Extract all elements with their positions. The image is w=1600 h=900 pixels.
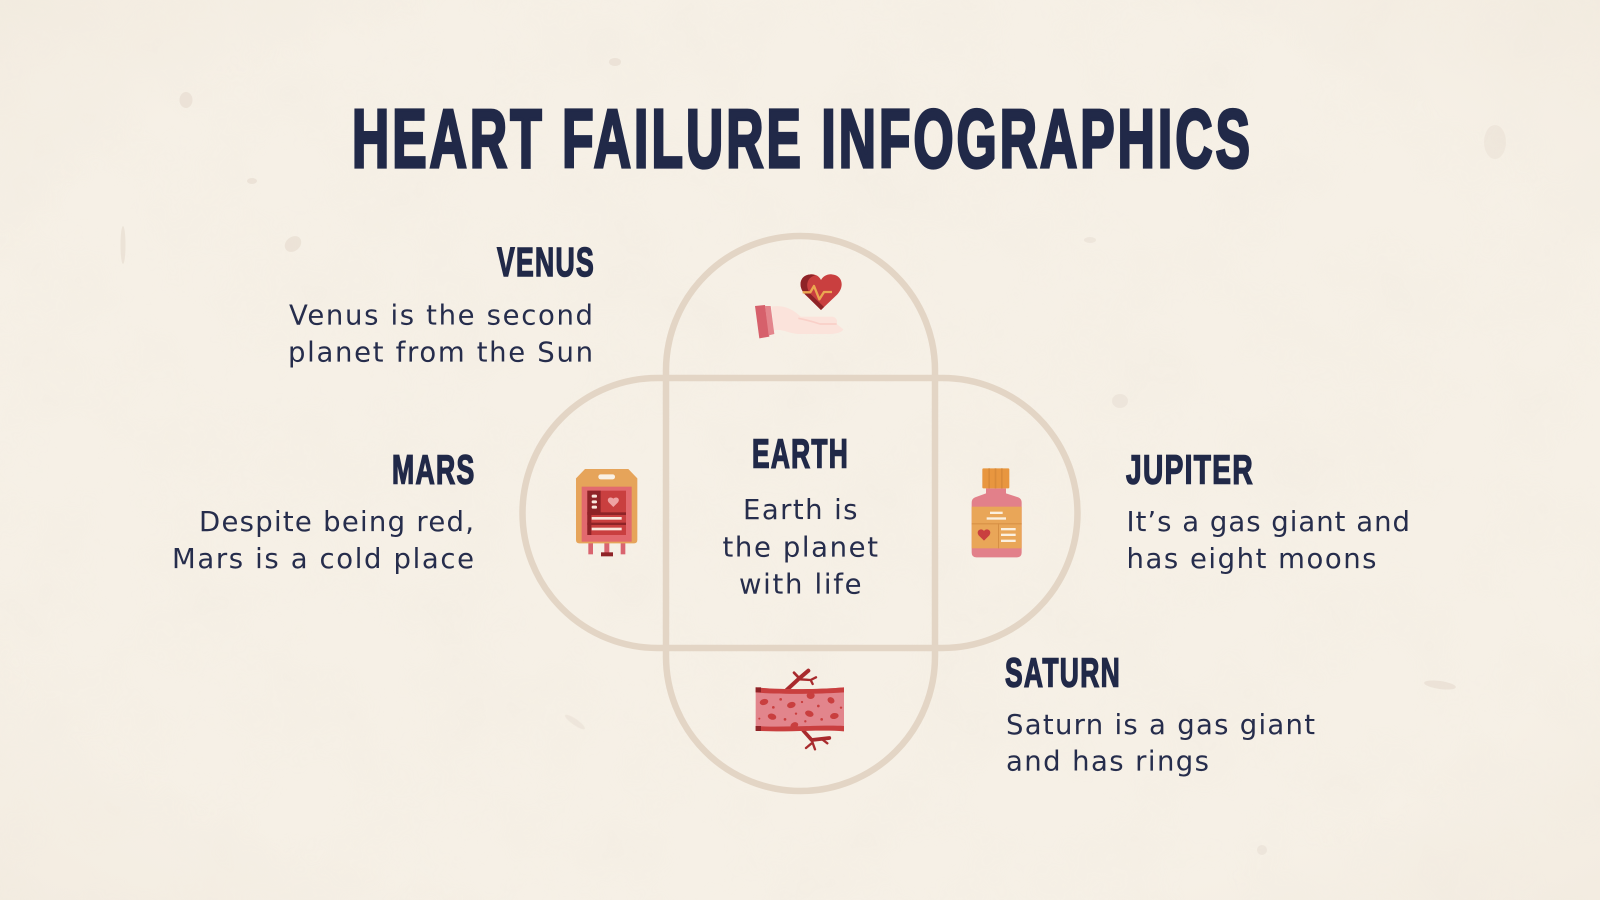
jupiter description: It’s a gas giant and: [1126, 506, 1410, 538]
jupiter heading: JUPITER: [1126, 446, 1254, 492]
panel: jupiter: [1126, 446, 1410, 575]
icon: blood vessel: [756, 671, 844, 749]
earth heading: EARTH: [752, 430, 849, 476]
mars heading: MARS: [392, 446, 476, 492]
icon: heart held over hand: [755, 274, 843, 338]
earth description: [722, 494, 878, 600]
saturn description: [1006, 709, 1315, 778]
mars description: Despite being red,: [199, 506, 474, 538]
venus description: Venus is the second: [289, 300, 593, 332]
mars description: [172, 506, 474, 575]
panel: venus: [288, 239, 595, 368]
venn diagram: two crossing pills: [522, 236, 1078, 791]
earth description: the planet: [722, 532, 878, 564]
panel: earth: [722, 430, 878, 600]
saturn heading: SATURN: [1005, 650, 1121, 696]
mars description: Mars is a cold place: [172, 543, 474, 575]
icon: medicine bottle: [972, 468, 1022, 557]
venus description: planet from the Sun: [288, 336, 593, 368]
saturn description: Saturn is a gas giant: [1006, 709, 1315, 741]
icon: medical bag: [576, 469, 637, 556]
earth description: with life: [739, 568, 862, 600]
jupiter description: has eight moons: [1126, 543, 1376, 575]
jupiter description: [1126, 506, 1410, 575]
earth description: Earth is: [743, 494, 858, 526]
saturn description: and has rings: [1006, 746, 1209, 778]
panel: saturn: [1005, 650, 1315, 778]
venus description: [288, 300, 593, 368]
venus heading: VENUS: [497, 239, 595, 285]
panel: mars: [172, 446, 476, 575]
